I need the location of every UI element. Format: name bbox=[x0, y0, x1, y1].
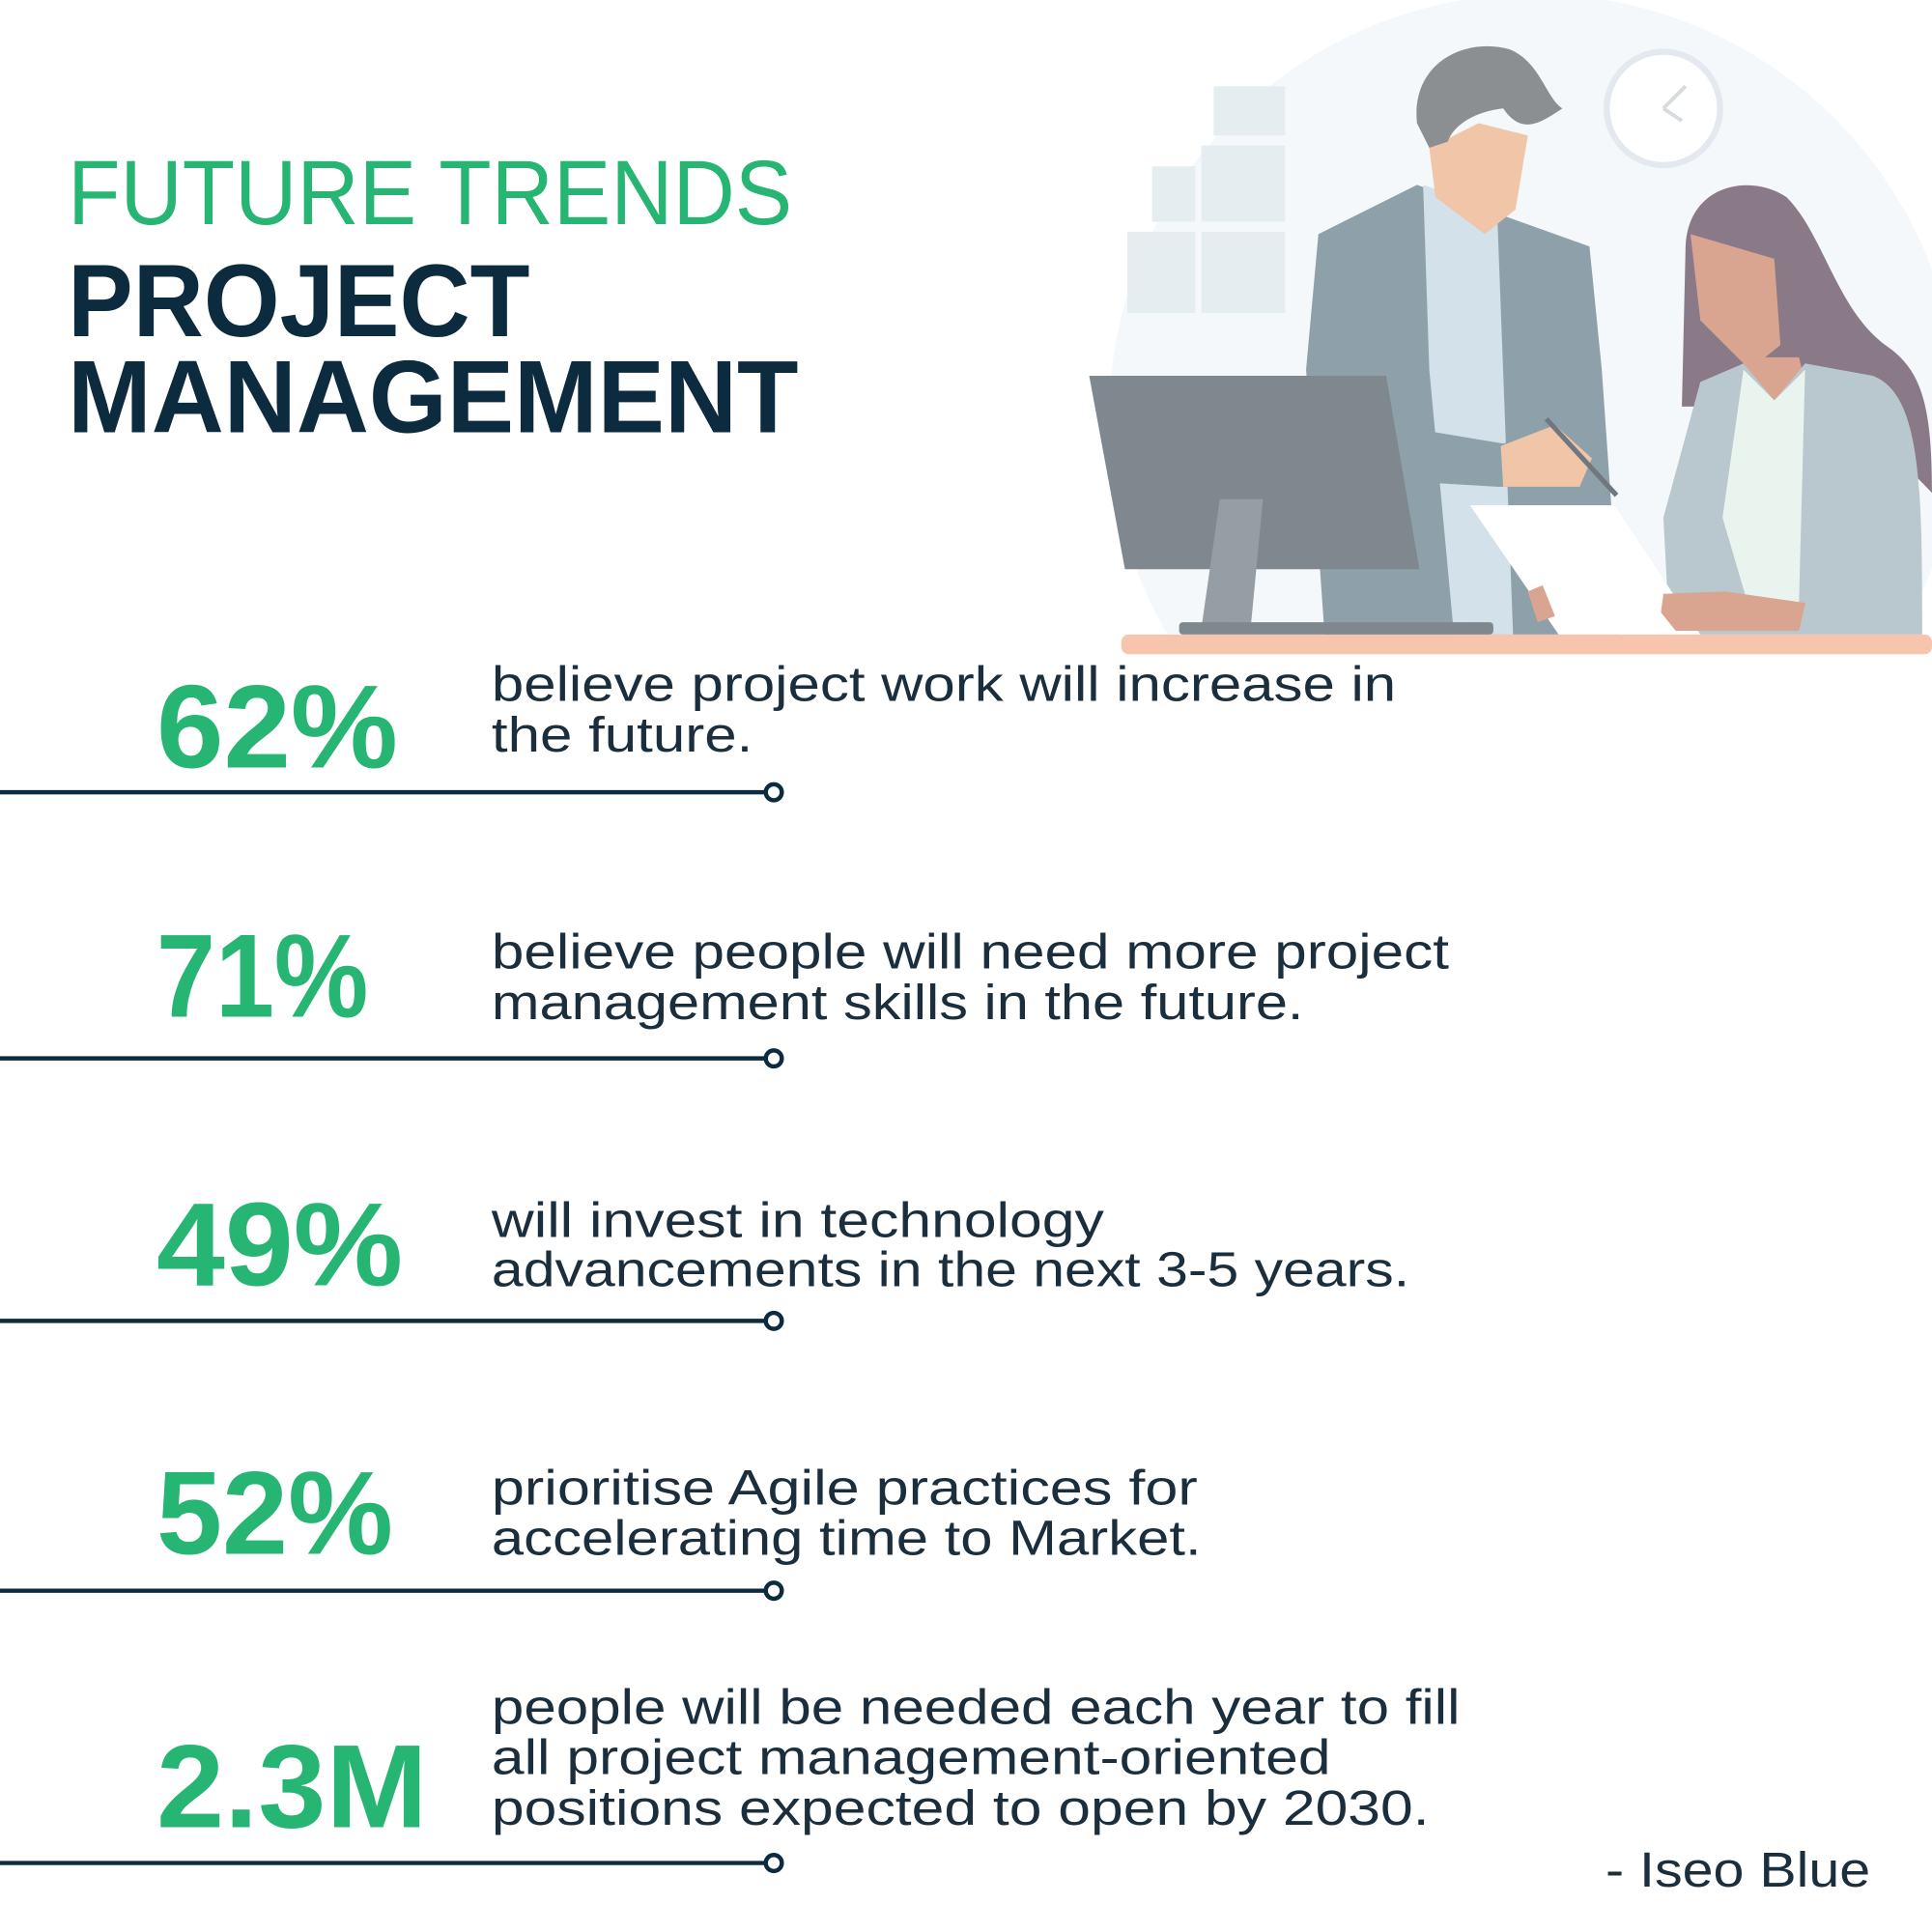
stat: 52% bbox=[0, 1446, 1202, 1599]
stat: 2.3M: 2.3M bbox=[156, 1720, 428, 1853]
stat: 71%: 71% bbox=[156, 909, 368, 1041]
illustration: office scene bbox=[1090, 0, 1932, 655]
stat: 49%: advancements in the next 3-5 years. bbox=[492, 1242, 1409, 1297]
source credit: - Iseo Blue bbox=[1605, 1842, 1870, 1897]
stat: 52%: prioritise Agile practices for bbox=[492, 1460, 1198, 1515]
stat: 49%: 49% bbox=[156, 1178, 403, 1310]
title bbox=[68, 143, 799, 455]
stat: 52%: 52% bbox=[156, 1446, 393, 1578]
stat: 49%: will invest in technology bbox=[491, 1193, 1104, 1248]
stat: 49% bbox=[0, 1178, 1409, 1329]
stat: 2.3M: positions expected to open by 2030. bbox=[492, 1780, 1430, 1835]
title: MANAGEMENT bbox=[68, 339, 799, 455]
title: PROJECT bbox=[68, 242, 529, 358]
stat: 71%: management skills in the future. bbox=[492, 975, 1303, 1030]
stat: 62%: 62% bbox=[156, 661, 398, 793]
stat: 71%: believe people will need more project bbox=[492, 924, 1449, 980]
stat: 71% bbox=[0, 909, 1449, 1066]
monitor bbox=[1090, 376, 1493, 635]
background circle bbox=[1111, 0, 1932, 634]
stat: 62%: the future. bbox=[492, 707, 753, 762]
man bbox=[1306, 46, 1620, 635]
desk bbox=[1122, 635, 1932, 654]
icon: clock bbox=[1606, 52, 1720, 165]
stat: 62%: believe project work will increase in bbox=[492, 657, 1396, 712]
stat: 62% bbox=[0, 657, 1396, 800]
stat: 2.3M: all project management-oriented bbox=[492, 1730, 1331, 1785]
title: FUTURE TRENDS bbox=[68, 143, 792, 244]
woman bbox=[1470, 185, 1932, 635]
window bbox=[1127, 86, 1285, 313]
stat: 2.3M bbox=[0, 1679, 1460, 1871]
stat: 52%: accelerating time to Market. bbox=[492, 1511, 1202, 1566]
stat: 2.3M: people will be needed each year to fill bbox=[492, 1679, 1460, 1734]
